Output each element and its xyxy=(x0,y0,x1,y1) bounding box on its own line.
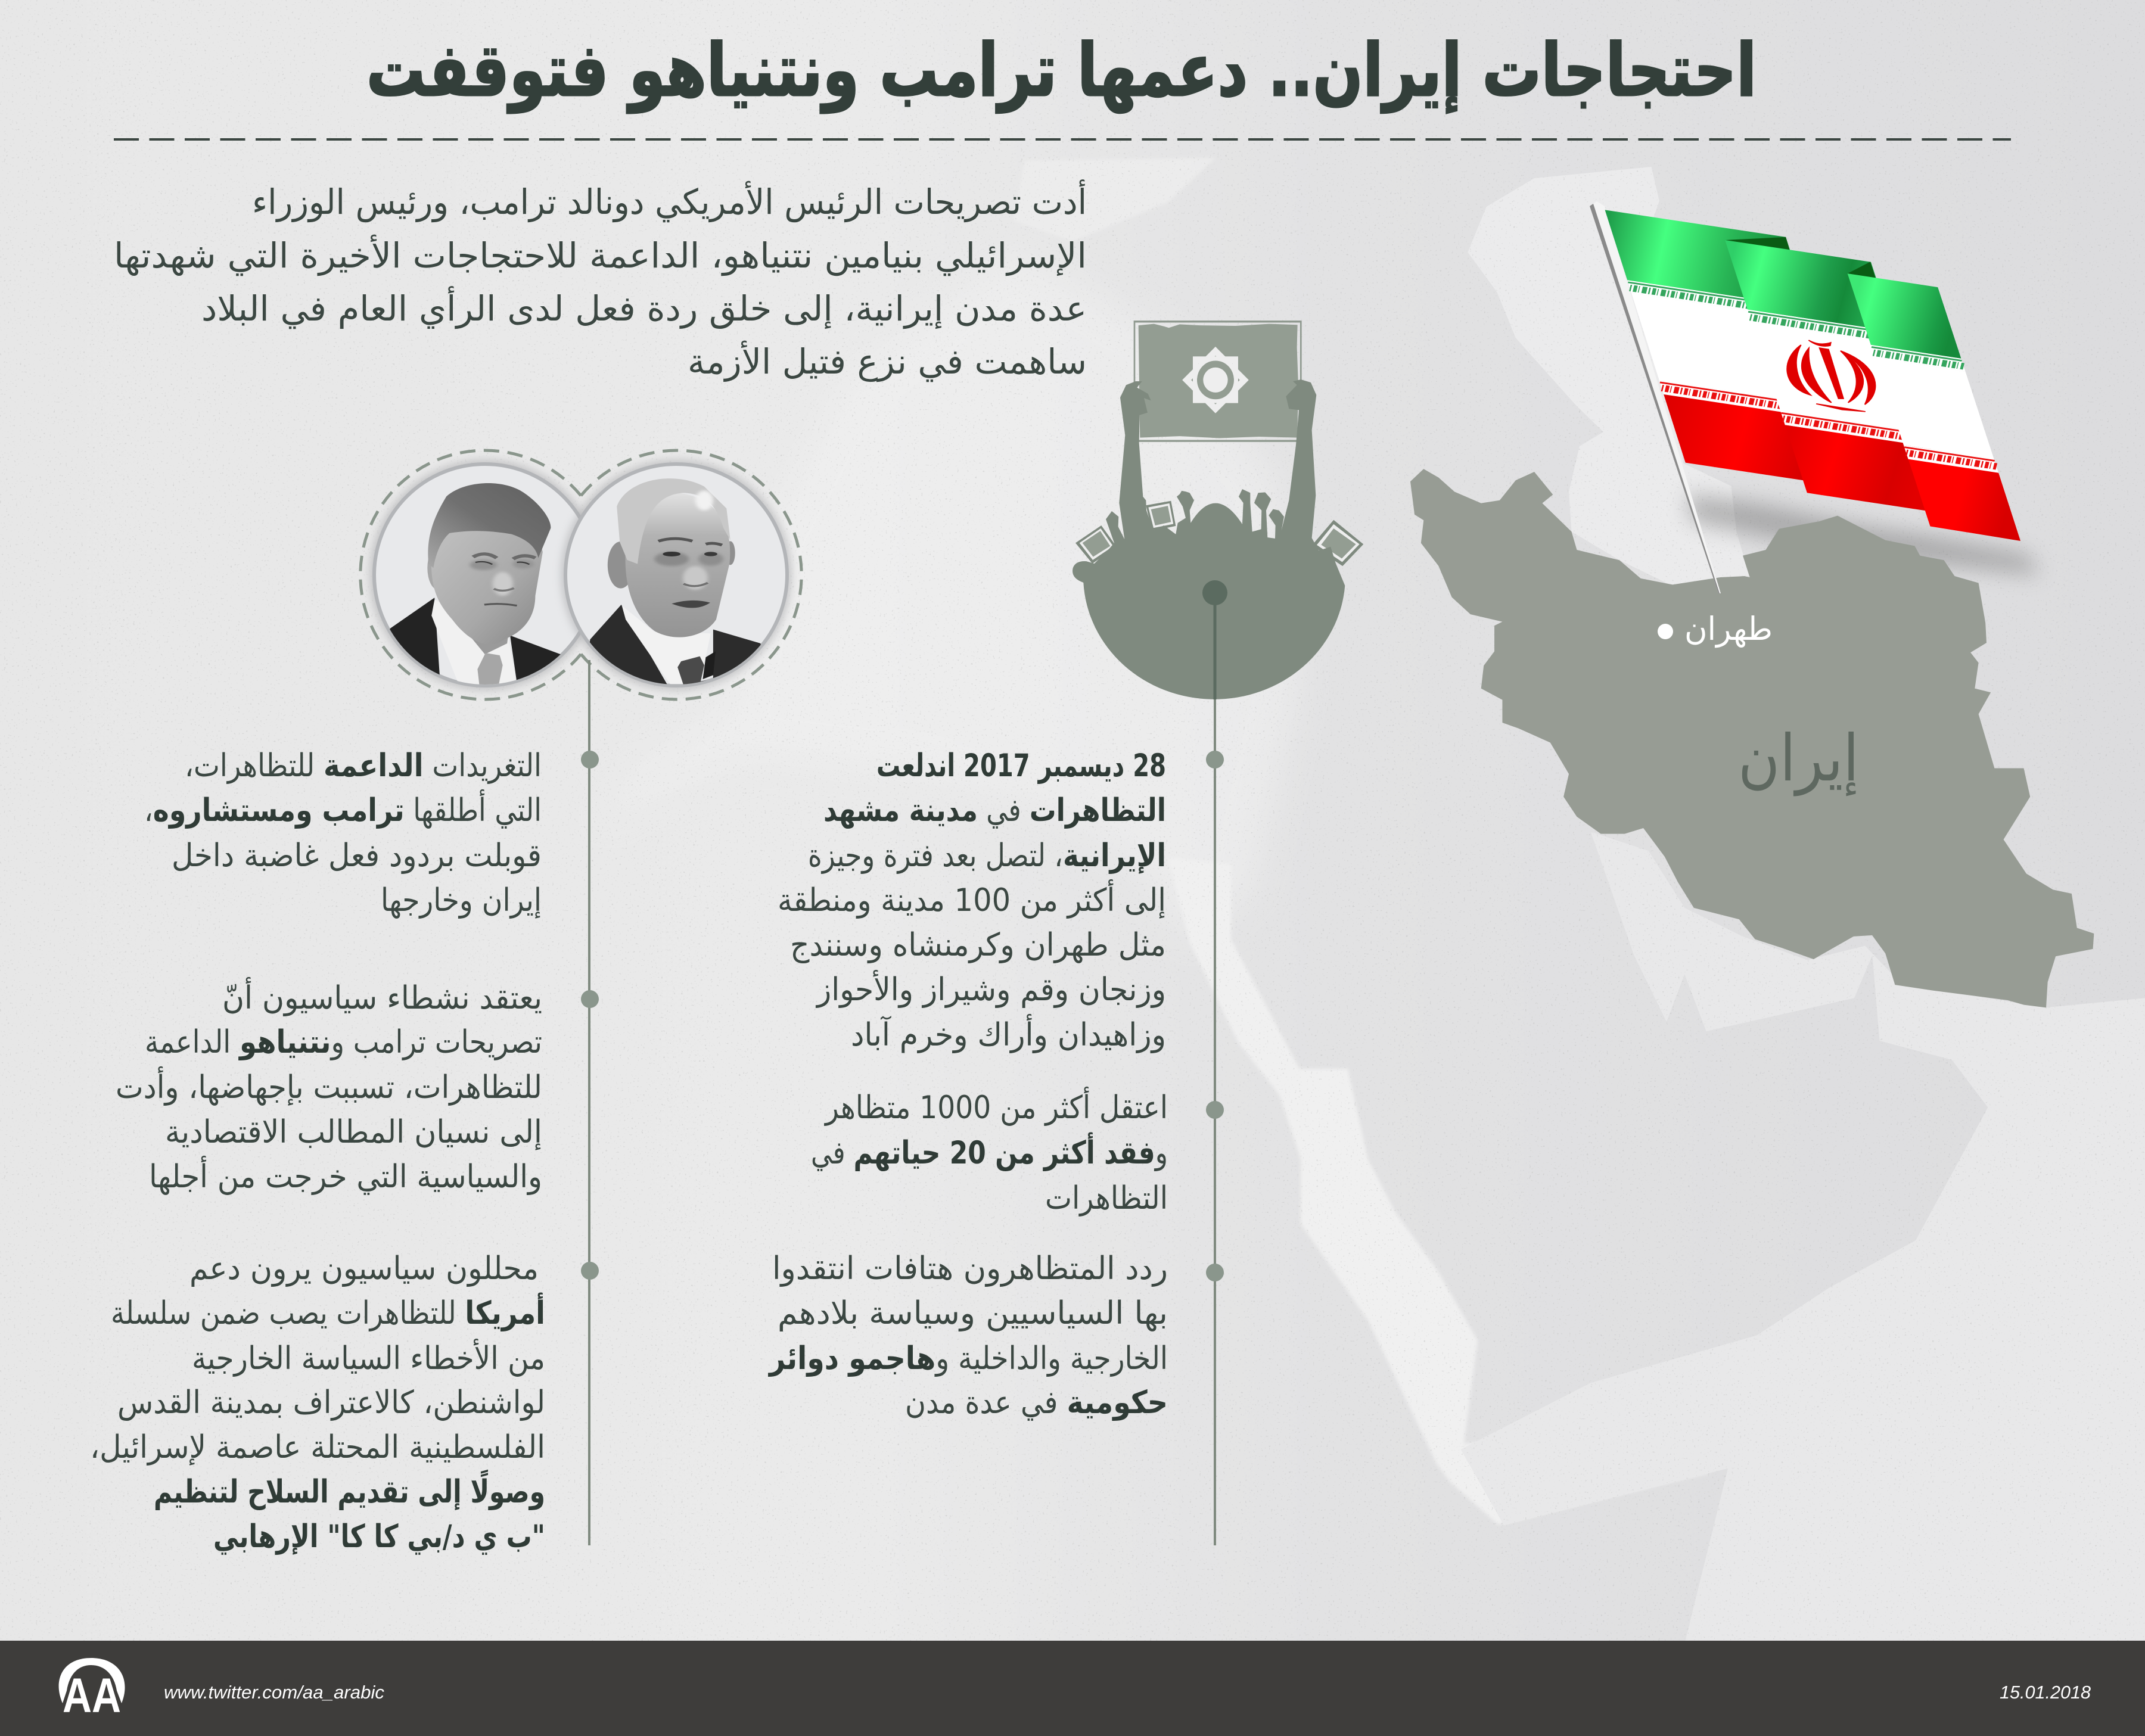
tehran label: طهران xyxy=(1684,610,1773,648)
left text block 1: التي أطلقها ترامب ومستشاروه، xyxy=(144,789,542,829)
date: 15.01.2018 xyxy=(2000,1682,2091,1703)
logo: Anadolu Agency: AA xyxy=(63,1669,121,1723)
twitter url: www.twitter.com/aa_arabic xyxy=(164,1682,384,1703)
right text block 1: مثل طهران وكرمنشاه وسنندج xyxy=(790,927,1166,963)
left text block 3: أمريكا للتظاهرات يصب ضمن سلسلة xyxy=(111,1292,545,1331)
right text block 1 xyxy=(778,748,1166,1053)
left text block 1: إيران وخارجها xyxy=(381,882,542,919)
right timeline dots xyxy=(1206,751,1224,1281)
dashed title rule xyxy=(114,138,2011,141)
trump portrait xyxy=(370,460,600,699)
flag xyxy=(1590,201,2020,593)
intro text: أدت تصريحات الرئيس الأمريكي دونالد ترامب، ورئيس الوزراء xyxy=(252,179,1087,223)
map: Black Sea xyxy=(1013,158,1216,241)
intro text: الإسرائيلي بنيامين نتنياهو، الداعمة للاحتجاجات الأخيرة التي شهدتها xyxy=(114,234,1087,276)
right text block 2: وفقد أكثر من 20 حياتهم في xyxy=(811,1132,1168,1171)
footer bar xyxy=(0,1641,2145,1736)
map: Persian Gulf and Arabian Sea xyxy=(1461,832,2145,1659)
small placard middle xyxy=(1146,501,1176,531)
left text block 3: "ب ي د/بي كا كا" الإرهابي xyxy=(213,1519,545,1555)
right text block 1: إلى أكثر من 100 مدينة ومنطقة xyxy=(778,879,1166,919)
right text block 2: اعتقل أكثر من 1000 متظاهر xyxy=(823,1087,1168,1126)
left text block 3: لواشنطن، كالاعتراف بمدينة القدس xyxy=(117,1385,545,1421)
dashed rings xyxy=(360,450,801,699)
flag shadow xyxy=(1686,494,2041,575)
iran label: إيران xyxy=(1738,721,1859,797)
right text block 2: التظاهرات xyxy=(1045,1180,1168,1217)
left text block 2: يعتقد نشطاء سياسيون أنّ xyxy=(222,977,542,1016)
map: Caspian Sea xyxy=(1468,167,1750,586)
left timeline xyxy=(581,660,599,1545)
left text block 1: التغريدات الداعمة للتظاهرات، xyxy=(185,748,542,784)
flag emblem xyxy=(1787,340,1875,412)
small placard left xyxy=(1075,525,1117,564)
left text block 3: من الأخطاء السياسة الخارجية xyxy=(192,1339,545,1377)
right text block 3: بها السياسيين وسياسة بلادهم xyxy=(778,1295,1168,1331)
right text block 1: وزاهيدان وأراك وخرم آباد xyxy=(851,1014,1166,1053)
flag cloth xyxy=(1605,210,2020,541)
iran country shape xyxy=(1410,469,2094,1007)
right text block 1: التظاهرات في مدينة مشهد xyxy=(823,792,1166,829)
right timeline xyxy=(1206,699,1224,1545)
portraits xyxy=(360,450,801,699)
intro text: عدة مدن إيرانية، إلى خلق ردة فعل لدى الرأي العام في البلاد xyxy=(201,286,1087,329)
timeline line inside disc xyxy=(1213,593,1217,699)
right text block 2 xyxy=(811,1087,1168,1217)
intro text xyxy=(114,179,1087,382)
right text block 3 xyxy=(767,1250,1168,1421)
intro text: ساهمت في نزع فتيل الأزمة xyxy=(688,340,1087,382)
left text block 2 xyxy=(116,977,542,1195)
map: Mediterranean soft area xyxy=(596,250,1299,943)
timeline right origin dot xyxy=(1202,580,1227,605)
left text block 2: والسياسية التي خرجت من أجلها xyxy=(149,1156,542,1195)
title: احتجاجات إيران.. دعمها ترامب ونتنياهو فتوقفت xyxy=(366,28,1757,113)
right text block 3: الخارجية والداخلية وهاجمو دوائر xyxy=(767,1340,1168,1377)
right timeline line xyxy=(1214,699,1216,1545)
protest illustration xyxy=(1072,322,1363,699)
left text block 2: للتظاهرات، تسببت بإجهاضها، وأدت xyxy=(116,1066,542,1106)
protest sign with frame xyxy=(1134,322,1301,441)
map: Red Sea xyxy=(1168,858,1710,1525)
tehran dot xyxy=(1658,624,1673,639)
small placard right xyxy=(1312,520,1363,566)
right text block 3: ردد المتظاهرون هتافات انتقدوا xyxy=(772,1250,1168,1287)
right text block 1: الإيرانية، لتصل بعد فترة وجيزة xyxy=(808,838,1166,874)
left text block 1: قوبلت بردود فعل غاضبة داخل xyxy=(172,838,542,874)
right text block 1: وزنجان وقم وشيراز والأحواز xyxy=(815,970,1166,1008)
flag pole xyxy=(1590,201,1721,593)
left timeline line xyxy=(588,660,590,1545)
netanyahu portrait xyxy=(561,460,791,699)
left text block 3: وصولًا إلى تقديم السلاح لتنظيم xyxy=(154,1469,545,1510)
left text block 2: إلى نسيان المطالب الاقتصادية xyxy=(165,1114,542,1150)
sign emblem xyxy=(1187,351,1244,409)
left text block 2: تصريحات ترامب ونتنياهو الداعمة xyxy=(145,1024,542,1060)
crowd silhouette and half disc xyxy=(1072,379,1345,699)
iran map xyxy=(1410,469,2094,1007)
left timeline dots xyxy=(581,751,599,1280)
left text block 3: الفلسطينية المحتلة عاصمة لإسرائيل، xyxy=(90,1429,545,1466)
left text block 1 xyxy=(144,748,542,919)
left text block 3 xyxy=(90,1250,545,1555)
left text block 3: محللون سياسيون يرون دعم xyxy=(189,1250,539,1287)
right text block 3: حكومية في عدة مدن xyxy=(905,1385,1168,1421)
right text block 1: 28 ديسمبر 2017 اندلعت xyxy=(876,748,1166,784)
